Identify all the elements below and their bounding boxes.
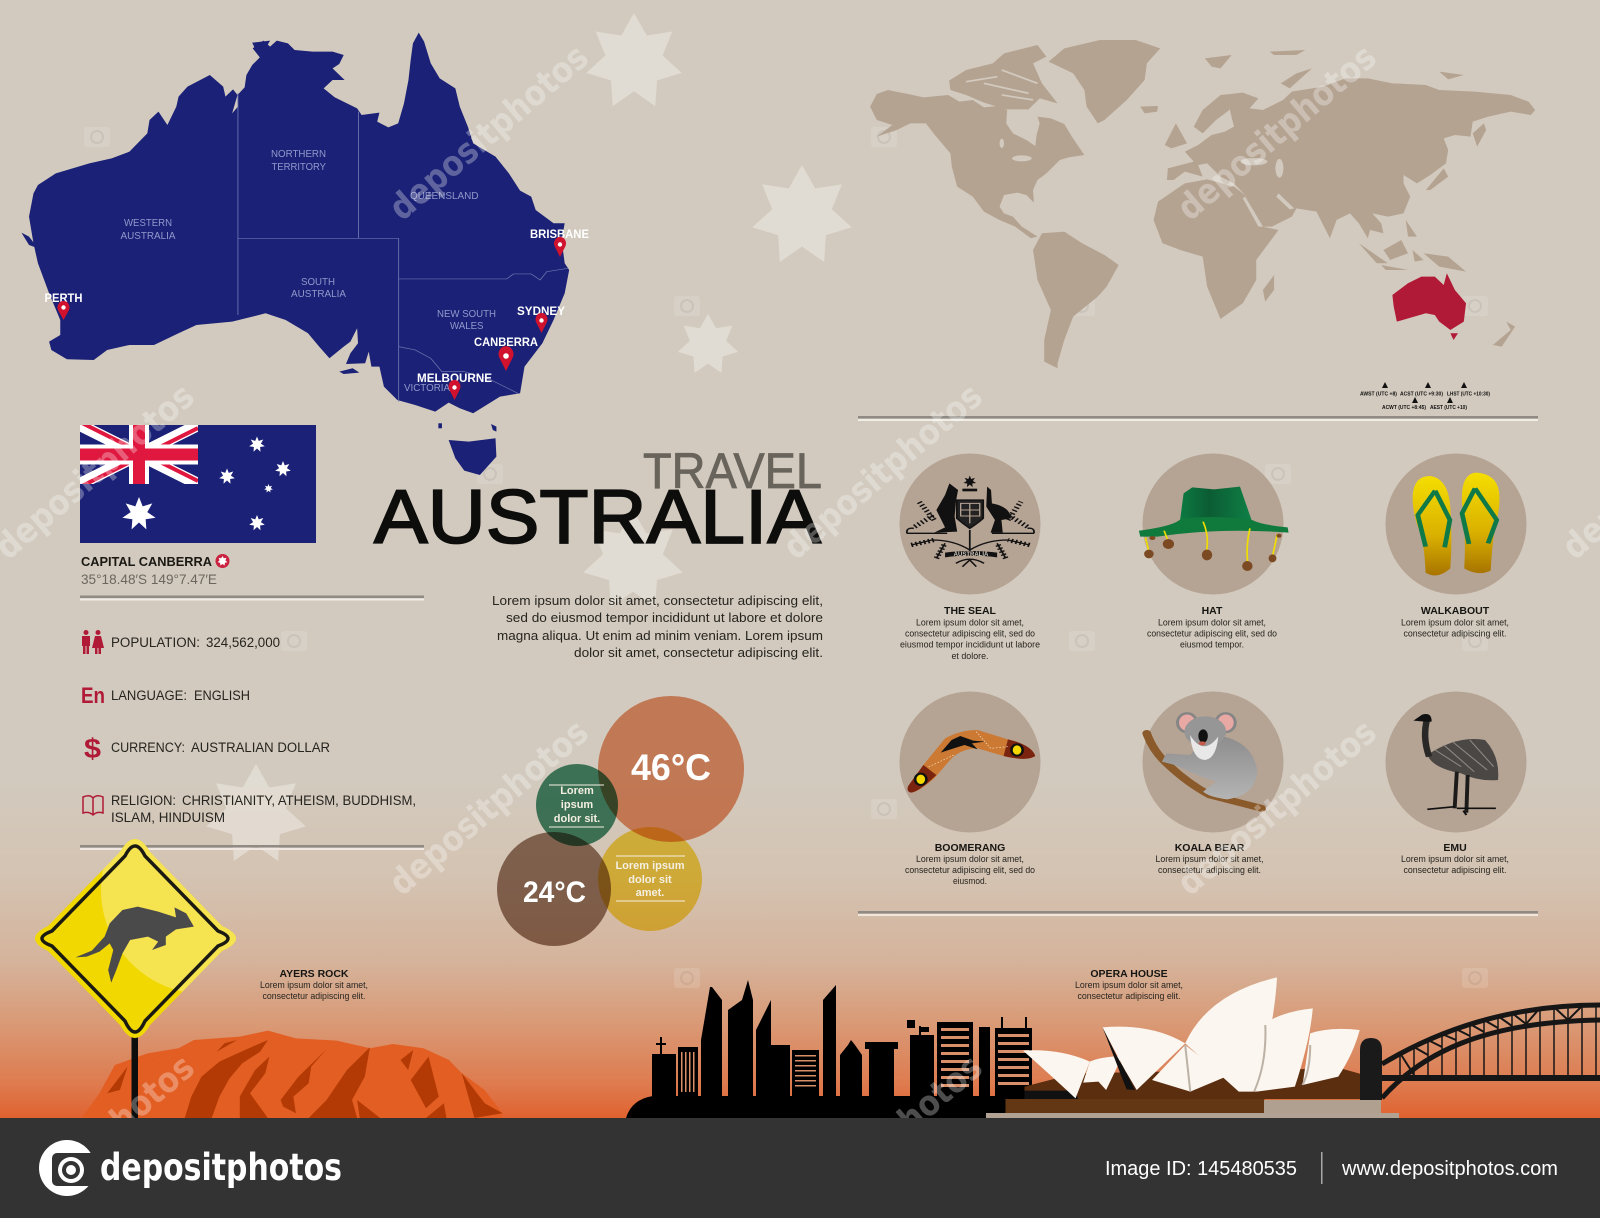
intro paragraph: Lorem ipsum dolor sit amet, consectetur adipiscing elit, <box>492 593 823 608</box>
item: emu text: consectetur adipiscing elit. <box>1404 865 1506 876</box>
text: Ayers Rock: AYERS ROCK <box>279 968 349 980</box>
lakes and inland seas <box>966 70 1294 227</box>
building window stripes <box>681 1028 1029 1092</box>
religion: ISLAM, HINDUISM <box>111 810 225 825</box>
item: emu <box>1386 692 1526 832</box>
diagonal stock watermarks: depositphotos <box>1170 712 1384 904</box>
text: Opera House: consectetur adipiscing elit. <box>1078 991 1180 1002</box>
title: TRAVEL <box>643 443 822 499</box>
item: boomerang text: BOOMERANG <box>935 842 1005 854</box>
temperature circles <box>497 696 744 946</box>
map landmass <box>21 33 569 475</box>
time zones: AWST (UTC +8) <box>1360 392 1397 398</box>
region labels: AUSTRALIA <box>291 288 346 300</box>
panel: icon grid <box>900 454 1526 887</box>
diagonal stock watermarks: depositphotos <box>1170 37 1384 229</box>
item: emu text: EMU <box>1443 842 1467 854</box>
item: koala bear text: consectetur adipiscing elit. <box>1158 865 1261 876</box>
yellow circle text <box>615 856 685 902</box>
currency: CURRENCY: <box>111 740 185 755</box>
time zones: ACST (UTC +9:30) <box>1400 392 1443 398</box>
item: emu text <box>1401 842 1509 876</box>
item: the seal <box>900 454 1040 594</box>
item: koala bear text: KOALA BEAR <box>1175 842 1245 854</box>
region labels: TERRITORY <box>272 161 326 173</box>
intro paragraph: magna aliqua. Ut enim ad minim veniam. Lorem ipsum <box>497 628 823 643</box>
item: the seal text: THE SEAL <box>944 605 997 617</box>
region labels: VICTORIA <box>404 382 450 394</box>
text: Ayers Rock: Lorem ipsum dolor sit amet, <box>260 980 368 991</box>
language: ENGLISH <box>194 688 250 703</box>
text: Opera House <box>1075 968 1183 1002</box>
world landmasses <box>870 40 1535 368</box>
bridge pylon <box>1360 1038 1382 1100</box>
population: 324,562,000 <box>206 635 280 650</box>
icon: currency: $ <box>84 733 101 764</box>
city labels: BRISBANE <box>530 229 589 241</box>
green circle text <box>549 784 604 828</box>
item: hat text: consectetur adipiscing elit, sed do <box>1147 628 1277 640</box>
background stars <box>206 13 852 861</box>
yellow circle text: amet. <box>636 887 664 899</box>
region labels: NEW SOUTH <box>437 308 496 320</box>
city labels: PERTH <box>44 293 82 305</box>
time zones: LHST (UTC +10:30) <box>1447 392 1490 398</box>
item: walkabout text: WALKABOUT <box>1421 605 1490 617</box>
illustration: Ayers Rock <box>82 1031 503 1118</box>
icon: Australian flag <box>80 422 316 543</box>
green circle text: Lorem <box>560 785 594 797</box>
religion <box>111 793 416 825</box>
item: the seal text: consectetur adipiscing elit, sed do <box>905 628 1035 640</box>
text: Ayers Rock: consectetur adipiscing elit. <box>262 991 366 1002</box>
item: hat text <box>1147 605 1277 650</box>
high temperature: 46°C <box>631 747 711 788</box>
yellow circle text: Lorem ipsum <box>615 860 685 872</box>
icon: language: En <box>81 683 105 708</box>
state borders <box>238 93 568 402</box>
region labels: QUEENSLAND <box>410 190 479 202</box>
harbour bridge <box>1382 1005 1600 1098</box>
item: walkabout <box>1386 454 1526 594</box>
item: boomerang text: eiusmod. <box>953 876 987 887</box>
capital heading: CAPITAL CANBERRA <box>81 554 213 569</box>
opera house base <box>986 1099 1399 1118</box>
website: www.depositphotos.com <box>1341 1158 1558 1180</box>
item: walkabout text <box>1401 605 1509 640</box>
item: the seal text: eiusmod tempor incididunt ut labore <box>900 640 1040 650</box>
language: LANGUAGE: <box>111 688 187 703</box>
icon: people <box>82 630 104 654</box>
title: AUSTRALIA <box>374 475 821 560</box>
green circle text: dolor sit. <box>554 813 600 825</box>
footer separator <box>1321 1152 1322 1184</box>
panel: country facts <box>80 422 416 825</box>
diagonal stock watermarks: depositphotos <box>382 37 596 229</box>
diagonal stock watermarks: depositphotos <box>382 712 596 904</box>
item: the seal text: et dolore. <box>952 651 988 662</box>
item: hat text: Lorem ipsum dolor sit amet, <box>1158 618 1266 628</box>
time zones: ACWT (UTC +8:45) <box>1382 405 1426 411</box>
item: walkabout text: Lorem ipsum dolor sit amet, <box>1401 618 1509 628</box>
item: hat text: eiusmod tempor. <box>1180 640 1244 650</box>
city labels: MELBOURNE <box>417 373 492 385</box>
illustration: city skyline <box>626 980 1032 1118</box>
yellow circle text: dolor sit <box>628 874 672 886</box>
item: hat <box>1139 454 1289 594</box>
text: Opera House: Lorem ipsum dolor sit amet, <box>1075 980 1183 991</box>
text: Ayers Rock <box>260 968 368 1002</box>
region labels <box>120 148 496 394</box>
green circle text: ipsum <box>561 799 593 811</box>
religion: CHRISTIANITY, ATHEISM, BUDDHISM, <box>182 793 416 808</box>
item: walkabout text: consectetur adipiscing elit. <box>1404 628 1506 640</box>
icon: book <box>83 796 103 815</box>
Australia highlighted <box>1392 273 1466 340</box>
time zones <box>1360 382 1490 411</box>
intro paragraph <box>492 593 823 660</box>
map pins <box>58 237 566 400</box>
opera house shells <box>1023 977 1370 1099</box>
camera watermark marks <box>84 127 1488 988</box>
item: emu text: Lorem ipsum dolor sit amet, <box>1401 854 1509 865</box>
item: koala bear <box>1142 692 1284 832</box>
population: POPULATION: <box>111 635 200 650</box>
intro paragraph: dolor sit amet, consectetur adipiscing elit. <box>574 645 823 660</box>
item: boomerang text: consectetur adipiscing elit, sed do <box>905 865 1035 876</box>
currency: AUSTRALIAN DOLLAR <box>191 740 330 755</box>
item: koala bear text: Lorem ipsum dolor sit amet, <box>1156 854 1264 865</box>
text: Opera House: OPERA HOUSE <box>1090 968 1168 980</box>
city labels: CANBERRA <box>474 337 538 349</box>
item: hat text: HAT <box>1202 605 1223 617</box>
icon: capital star <box>216 554 230 568</box>
icon: camera logo <box>39 1140 96 1196</box>
panel: Australia map <box>21 33 589 475</box>
item: the seal: AUSTRALIA <box>954 552 989 558</box>
time zones: AEST (UTC +10) <box>1430 405 1467 411</box>
item: the seal text: Lorem ipsum dolor sit amet, <box>916 618 1024 628</box>
logo wordmark: depositphotos <box>100 1146 342 1189</box>
item: the seal text <box>900 605 1040 662</box>
region labels: AUSTRALIA <box>120 230 176 242</box>
region labels: WALES <box>450 320 484 332</box>
population <box>111 635 280 650</box>
region labels: WESTERN <box>124 217 172 229</box>
panel: world map <box>870 40 1535 411</box>
title <box>374 443 822 560</box>
region labels: SOUTH <box>301 276 335 288</box>
currency <box>111 740 330 755</box>
item: boomerang text: Lorem ipsum dolor sit amet, <box>916 854 1024 865</box>
seal foliage <box>911 502 1030 558</box>
illustration: Sydney Opera House <box>986 977 1600 1118</box>
item: boomerang text <box>905 842 1035 887</box>
region labels: NORTHERN <box>271 148 326 160</box>
low temperature: 24°C <box>523 876 586 909</box>
icon: kangaroo road sign <box>35 839 236 1118</box>
city labels: SYDNEY <box>517 306 565 318</box>
language <box>111 688 250 703</box>
coordinates: 35°18.48′S 149°7.47′E <box>81 571 217 587</box>
religion: RELIGION: <box>111 793 176 808</box>
item: boomerang <box>900 692 1040 832</box>
footer bar <box>0 1118 1600 1218</box>
divider lines <box>80 416 1538 916</box>
image id: Image ID: 145480535 <box>1105 1158 1297 1180</box>
intro paragraph: sed do eiusmod tempor incididunt ut labore et dolore <box>506 610 823 625</box>
item: koala bear text <box>1156 842 1264 876</box>
diagonal stock watermarks: depositphotos <box>776 376 990 568</box>
city labels <box>44 229 589 385</box>
